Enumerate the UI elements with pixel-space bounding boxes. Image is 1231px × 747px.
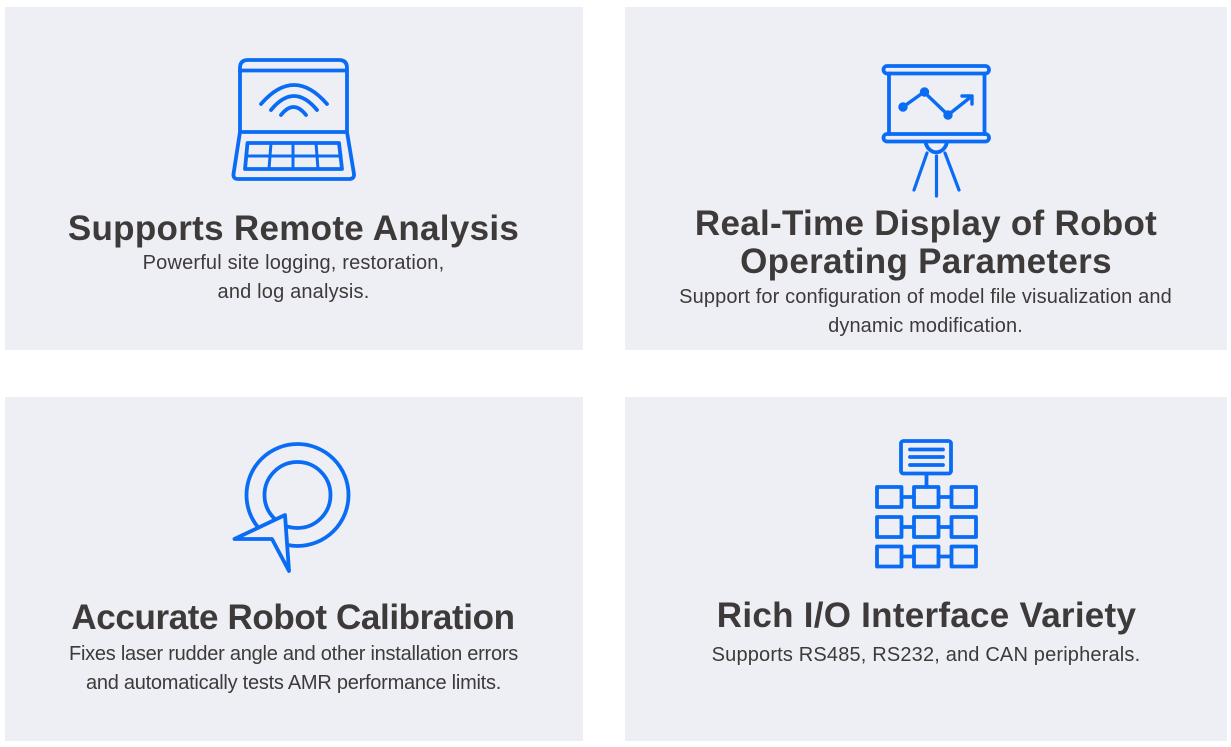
heading: accurate robot calibration: Accurate Robot Calibration bbox=[71, 598, 515, 637]
text: calibration description: and automatically tests AMR performance limits. bbox=[86, 672, 501, 694]
text: real-time display description bbox=[679, 286, 1172, 337]
panel: rich I/O interface variety bbox=[625, 397, 1227, 741]
icon: presentation board with chart bbox=[882, 64, 991, 198]
icon: calibration target with pointer bbox=[232, 442, 350, 573]
text: remote analysis description: and log analysis. bbox=[218, 281, 369, 303]
panel: accurate robot calibration bbox=[5, 397, 583, 741]
heading: supports remote analysis: Supports Remote Analysis bbox=[68, 209, 519, 248]
text: real-time display description: Support for configuration of model file visualization and bbox=[679, 286, 1172, 308]
text: real-time display description: dynamic modification. bbox=[828, 315, 1023, 337]
icon: laptop with wifi bbox=[232, 58, 356, 181]
heading: real-time display: Operating Parameters bbox=[740, 242, 1112, 281]
icon: I/O interface tree bbox=[875, 439, 978, 568]
text: I/O description: Supports RS485, RS232, and CAN peripherals. bbox=[712, 644, 1140, 666]
text: calibration description bbox=[69, 643, 518, 694]
text: calibration description: Fixes laser rudder angle and other installation errors bbox=[69, 643, 518, 665]
panel: supports remote analysis bbox=[5, 7, 583, 350]
text: remote analysis description: Powerful site logging, restoration, bbox=[143, 252, 444, 274]
text: remote analysis description bbox=[143, 252, 444, 303]
heading: real-time display: Real-Time Display of Robot bbox=[695, 204, 1157, 243]
heading: rich I/O interface variety: Rich I/O Interface Variety bbox=[717, 596, 1136, 635]
heading: real-time display bbox=[695, 204, 1157, 281]
panel: real-time display bbox=[625, 7, 1227, 350]
